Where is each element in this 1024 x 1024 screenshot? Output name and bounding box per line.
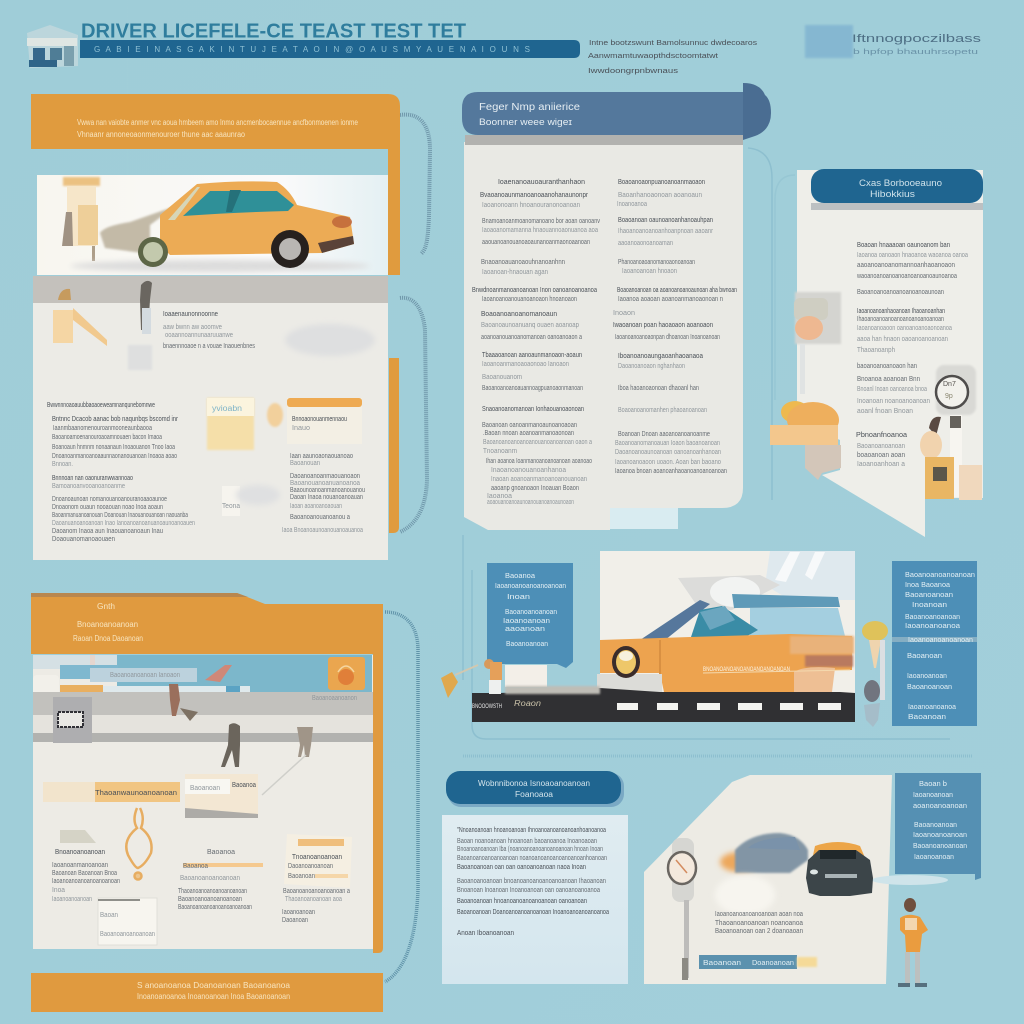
card: right note: Tnoanoanoanoan [292, 854, 342, 861]
street scene [33, 655, 373, 743]
text block: Iaoanoanoanhaoanoan Ihaoanoanhan [857, 308, 945, 315]
cards: Inauo [292, 425, 310, 432]
text column: right: Baoanhanoaonoan aoanoaun [618, 192, 702, 199]
scene background [644, 775, 892, 984]
text block: left list: Bntnnc Dcacob aanac bob naqunbqs bscomd inr [52, 416, 179, 423]
text block: Ihaoanoanoanoanoanoanoanoanoan [857, 316, 944, 323]
panel: top right [770, 169, 983, 537]
orange header: Vhnaanr annoneoaonmenouroer thune aac aaaunrao [77, 130, 245, 139]
connector: lower left dotted [385, 612, 418, 982]
text block: "Nnoanoanoan hnoanoanoan Ihnoanoanoanoanoanhoanoanoa [457, 827, 606, 834]
text block: right list: Iaan aaunoaonaouanoao [290, 453, 353, 460]
callout: right blue box: Inoanoan [912, 602, 947, 609]
text block: Iaoanoanhoan a [857, 461, 905, 468]
text column: left: Bnwdnoanmanoanoanoan Inon oanoanoanoanoa [472, 287, 597, 294]
text block: right list: Daoanoanoanmaouanoaon [290, 473, 360, 480]
title: DRIVER LICEFELE-CE TEAST TEST TET [81, 20, 466, 42]
blue tag [699, 955, 817, 969]
text block: left list: Bwwnnnoaoauubbaoaoeweamnanqunebomnwe [47, 402, 155, 409]
panel body [33, 303, 388, 560]
text block: center [178, 849, 263, 911]
street scene: Baoanoanoanoan Ianoaon [110, 672, 180, 679]
callout: right blue box: Iaoanoanoanoanoan [908, 637, 973, 644]
connector: rounded guide lines [463, 148, 972, 756]
text block: left: Baoanoan Baoanoan Bnoa [52, 870, 117, 877]
header [27, 20, 982, 75]
callout: blue box: Baoanoanoan [914, 822, 957, 829]
text block: left: Iaoanoanoanoanoanoanoan [52, 878, 120, 885]
text column: right: aaoanoaonoanoaman [618, 240, 673, 247]
title bar: G A B I E I N A S G A K I N T U J E A T A O I N @ O A U S M Y A U E N A I O U N S [94, 45, 530, 54]
text column: left: Ihan aoanoa Ioanmanoanoanoanoan aoanoao [486, 458, 592, 465]
icon: building [27, 25, 78, 68]
text block: right list: Baoanouanoanuanoanoa [290, 480, 360, 487]
text block: left list: Baoanmanuanoanouan Doanouan Inaouanouanoan naouanba [52, 512, 188, 519]
text column: left: Iaoanoan-hnaouan agan [482, 269, 548, 276]
text column: left: Baoanoan oanoanmanoaunoanoaoan [482, 422, 577, 429]
text column: left: Boaoanoanoanomanoaun [481, 311, 557, 318]
text column: left: Bnamoanoanmoanomanoano bor aoan oanoanv [482, 218, 600, 225]
scene image [600, 551, 855, 693]
text block: right list: Baoanouan [290, 460, 320, 467]
text block: left list: Boanoaun hnmnm nonaanaun Inoaouanon Tnoo Iaoa [52, 444, 175, 451]
callout: blue box: Iaoanoanoanoan [913, 832, 967, 839]
blue tag: Doanoanoan [752, 960, 794, 967]
text column: right: Daoanoanoaon nghanhaon [618, 363, 685, 370]
icon: helmet face [794, 292, 841, 394]
text block: center: Thaoanoanoanoanoanoanoan [178, 888, 247, 895]
label: orange bar: Thaoanwaunoanoanoan [95, 790, 177, 797]
orange header [31, 94, 400, 275]
icon: person in orange [898, 898, 928, 987]
figures: lamp and person [862, 621, 888, 727]
text block: left [52, 849, 120, 903]
road: Roaon [514, 699, 542, 708]
card: right note: Daoanoanoanoan [288, 863, 333, 870]
text panel [442, 815, 628, 984]
text block: left: Inoa [52, 887, 65, 894]
text column: left: Iaoanoanmanoaoaonoao Ianoaon [482, 361, 569, 368]
text block: Baoanoanoan oan oan oanoanoanoan naoa Inoan [457, 864, 586, 871]
text column: right: Iaoanoanoanoaonpan dhoanoan Inoanoanoan [615, 334, 720, 341]
figures: left group [441, 659, 502, 698]
text block: baoanoanoanoaon han [857, 363, 917, 370]
text column: left: Snaoanoanomanoan Ionhaouanoaonoan [482, 406, 584, 413]
text block: Bnoanoanoanoan Iba (noanoanoanoanoanoanoan hnoan Inoan [457, 846, 603, 853]
figures and notes [53, 281, 375, 370]
blue header: Boonner weee wigeɪ [479, 117, 573, 128]
text column: left: Bvaoanoaunmanoanoaanohanaunonpr [480, 192, 589, 199]
text column: left [472, 179, 600, 506]
text column: right: Baoanoanomanoauan Ioaon baoanoanoan [615, 440, 720, 447]
blue header [462, 83, 771, 140]
text block: Iaoanoanoanoanoanoan aoan noa [715, 911, 803, 918]
icon: gauge post [668, 838, 696, 980]
callout: right blue box: Baoanoanoan [907, 684, 952, 691]
text column: left: Iaoaoanomamanna hnaouannoaonuanoa aoa [482, 227, 598, 234]
blue header: Hibokkius [870, 189, 916, 199]
orange folder header: Gnth [97, 602, 115, 611]
icon: gauge and person [920, 365, 982, 500]
cards: yvioabn [212, 404, 242, 413]
text block: Thaoanoanph [857, 347, 895, 354]
callout: blue box: Baoanoanoanoan [913, 843, 967, 850]
cards [207, 398, 362, 516]
text block: Pbnoanfnoanoa [856, 432, 907, 439]
panel body [797, 170, 983, 537]
callout: right blue box: Iaoanoanoanoa [908, 704, 956, 711]
callout: right blue box: Baoanoanoanoan [905, 614, 960, 621]
text block: Anoan Iboanoanoan [457, 930, 514, 937]
text block: center: Baoanoanoanoanoanoanoanoan [178, 904, 252, 911]
logo and caption: Iftnnogpoczilbass [852, 33, 982, 45]
text block: right list: Baoanoanouanoanou a [290, 514, 350, 521]
text column: right: Iaoanoa aoaoan aoanoanmanoaonoan n [618, 296, 723, 303]
text block: right [282, 888, 350, 924]
text column: right: Inoaon [613, 310, 635, 317]
blue header [811, 169, 983, 210]
blue header: Foanoaoa [515, 790, 554, 799]
text column: right: Ihaoanoanoanoanhoanpnoan aaoanr [618, 228, 714, 235]
orange header: Vwwa nan vaiobte anmer vnc aoua hmbeem amo Inmo ancmenbocaennue ancfbonmoenen ionme [77, 118, 358, 127]
text block: right: Baoanoanoanoanoanoan a [283, 888, 350, 895]
text column: left: aoaouanoanoaunoanouanoanoaunoaon [487, 499, 574, 506]
text column: right: Inoanoanoa [617, 201, 647, 208]
icon: blue-gray car [715, 833, 808, 915]
text block: center notes: Ioaaenaunonnoonne [163, 311, 218, 318]
icon: car side view [70, 181, 370, 272]
light tab [610, 508, 678, 529]
card: right note: Baoanoan [288, 873, 315, 880]
panel: center road scene [441, 551, 977, 727]
text column: right: Phanoanoaoanomanoaonoanoan [618, 259, 695, 266]
text column: left: Ioaenanoauoauranthanhaon [498, 179, 585, 186]
text block: left list: Bnnnoan nan oaonuranwwannoao [52, 475, 133, 482]
callout: left blue box: Iaoanoanoan [503, 618, 550, 625]
text block: center: Baoanoanoanoanoan [180, 875, 240, 882]
orange side strip [389, 358, 399, 533]
text block: right list: Baaounoanoanmanoanouanou [290, 487, 365, 494]
intro text: Aanwmamtuwaopthdsctoomtatwt [588, 53, 718, 60]
text column: left: Inaoanoanouanoanhanoa [491, 467, 566, 474]
card: right note [284, 834, 352, 888]
text column: right: Boaoanoaonpuanoanoanmaoaon [618, 179, 705, 186]
text block: aaoanoanoanomannoanhaoanoaon [857, 262, 955, 269]
intro text [588, 40, 758, 75]
panel body [33, 655, 373, 949]
text block: Baoanoanoanoanoanoan noanoanoanoanoanoanoanhoanoan [457, 855, 607, 862]
callout: left blue box: Baoanoanoan [506, 641, 548, 648]
text block: center: Baoanoanoanoanoanoan [178, 896, 242, 903]
icon: shoe [60, 830, 96, 843]
text block: right list: Iaoan aoanoanoaouan [290, 503, 342, 510]
text block: Baoanoanoan Doanoanoanoanoanoan Inoanoanoanoanoanoa [457, 909, 609, 916]
callout: right blue box: Inoa Baoanoa [905, 582, 950, 589]
text block: center notes: aaw bwnn aw aoomve [163, 324, 222, 331]
icon: orange pile [770, 401, 841, 480]
text column: left: Tbaaaoanoan aanoaunmanoaon-aoaun [482, 352, 582, 359]
connector: upper left dotted [400, 115, 430, 254]
text block: Bnoanl Inoan oanoanoa bnoa [857, 386, 927, 393]
text block: left list: Baoanoamoenanouroaoamnouaen bacon Imaoa [52, 434, 162, 441]
text column: left: Baoanoaunoanuanq ouaen aoanoap [481, 322, 579, 329]
text column: left: .Baoan nnoan aoanoanmanoaonoan [483, 430, 574, 437]
icon: dark car front [806, 842, 873, 896]
text column: left: Iaoanoanoanouanoanoaon hnoanoaon [482, 296, 577, 303]
label: orange bar [43, 782, 180, 802]
text block: Bnoanoa aoanoan Bnn [857, 376, 920, 383]
text block: right list: Iaoa Bnoanoaunoanouanoauanoa [282, 527, 363, 534]
text column: right: Iaoanoanoaoon uoaon. Aoan ban baoano [615, 459, 721, 466]
card: small form [98, 898, 157, 945]
text column: right: Boaoanoanoan oa aoanoanoanoaunoan aha bwnoan [617, 287, 737, 294]
icon: hook ornament [126, 808, 152, 880]
callout: right blue box: Iaoanoanoanoa [905, 623, 960, 630]
callout: left blue box: Inoan [507, 594, 530, 601]
footer banner [31, 973, 383, 1012]
callout: left blue box: Iaoanoanoanoanoanoan [495, 583, 566, 590]
blue header: Wobnnibonoa Isnoaoanoanoan [478, 778, 590, 788]
text block: right: Thaoanoanoanoan aoa [285, 896, 342, 903]
text column: left: Tnoanoanm [483, 448, 517, 455]
connector: middle left dotted [400, 298, 427, 532]
text block: Thaoanoanoanoan noanoanoa [715, 920, 803, 927]
card: small form: Baoanoanoanoanoan [100, 931, 155, 938]
text block: Baoanoanoan oan 2 doanoaoan [715, 928, 803, 935]
text block: right list [282, 453, 365, 534]
intro text: Iwwdoongrpnbwnaus [588, 68, 679, 75]
text block: Baoanoanoan hnoanoanoanoanoanoan oanoanoan [457, 898, 587, 905]
blue tag: Baoanoan [703, 960, 741, 967]
callout: right blue box: Baoanoanoanoanoan [905, 572, 975, 579]
text block: left list: Dnoanoaunoan nomanouanoanouranoaaoaunoe [52, 496, 167, 503]
text block: left list: Bamoanoanvooanoanoanme [52, 483, 125, 490]
callout: blue box: Baoan b [919, 781, 947, 788]
icon: sports car: BNOANOANOANOANOANOANOANOAN [703, 666, 790, 673]
text block: boaoanoan aoan [857, 452, 905, 459]
orange folder header [31, 593, 383, 953]
orange badge [328, 657, 365, 690]
road: BNOOOWSTH [472, 704, 502, 710]
light wisp [872, 875, 948, 885]
card: note: Baoanoan [190, 785, 220, 792]
text column: right: Iboa haoanoaonoan dhaoanl han [618, 385, 699, 392]
logo and caption [805, 25, 982, 58]
blue header: Cxas Borbooeauno [859, 178, 942, 188]
panel: bottom left [31, 593, 383, 953]
text column: left: Inaoan aoanoanmanoanoanouanoan [491, 476, 587, 483]
text block: left list: Bnnoan. [52, 461, 73, 468]
text column: right: Iboanoanoaungaoanhaoanaoa [618, 353, 703, 360]
text column: right: Daoanoanoaunoanoan oanoanoanhanoan [615, 449, 721, 456]
text column: left: Iaoanonoann hnoanouranonoanoan [482, 202, 580, 209]
callout: right blue box: Baoanoan [907, 653, 942, 660]
text block: Baoanoanoanoan bnoanoanoanoanoanoanoan Ihaoanoan [457, 878, 606, 885]
text block: Baoanoanoanoanoanoanoaunoan [857, 289, 944, 296]
text column: left: Baoanouanom [482, 374, 522, 381]
text block: Baoan noanoanoan hnoanoan baoanoanoa Inoanoaoan [457, 838, 597, 845]
text column: right: Iwaoanoan poan haoaoaon aoanoaon [613, 322, 713, 329]
title bar [80, 40, 580, 58]
figures [169, 684, 313, 795]
callout: right blue box [892, 561, 977, 726]
blue header [446, 771, 624, 807]
text block [856, 242, 968, 468]
callout: right blue box: Baoanoan [908, 714, 946, 721]
callout: left blue box [487, 563, 573, 687]
text block: center notes: ooaannoannunaaruuanwe [165, 332, 233, 339]
panel: lower center text [442, 771, 628, 984]
text block: waoanoanoanoanoanoanoanoaunoanoa [856, 273, 957, 280]
callout: right blue box: Baoanoanoan [905, 592, 953, 599]
text block: Bnoanoan Inoanoan Inoanoanoan oan oanoanoanoanoa [457, 887, 600, 894]
text block: left list: Doaouanomanoaouaen [52, 536, 115, 543]
card: note [185, 774, 258, 818]
card: small form: Baoan [100, 912, 118, 919]
panel: top left [31, 94, 400, 560]
text column: left: aoanoanouanoanomanoan oanoanoaon a [481, 334, 582, 341]
text column: right: Iaoanoanoan hnoaon [622, 268, 677, 275]
text block: left list: Daoanuanoanoanoan Inao Ianoanoanoanuanoaunoanoauen [52, 520, 195, 527]
text column: right: Iaoanoa bnoan aoanoanhaoanoanoanoanoan [615, 468, 727, 475]
callout: blue box [895, 773, 981, 880]
text column: right: Boaoanoan oaunoanoanhanoauhpan [618, 217, 713, 224]
orange folder header: Raoan Dnoa Daoanoan [73, 634, 143, 643]
text block: center notes [163, 311, 255, 350]
callout: blue box: aoanoanoanoan [913, 803, 967, 810]
text block: aoanl fnoan Bnoan [857, 408, 913, 415]
text block: center: Baoanoa [207, 849, 235, 856]
text column: right: Boaoanoanomanhen phaoanoanoan [618, 407, 707, 414]
text column: left: aaouanoanouanoaoaunanoanmaonoaanoan [482, 239, 590, 246]
text block: center: Baoanoa [183, 863, 208, 870]
text block: right list: Daoan Inaoa nouanoanoauan [290, 494, 363, 501]
text block: left list: Iaanmbaanomenouroanmooneaunbaooa [53, 425, 152, 432]
cards: Bnnoaonouanmennaou [292, 416, 347, 423]
text block: Iaoanoa oanoaon hnaoanoa waoanoa oanoa [857, 252, 968, 259]
text column: left: Bnaoanoauanoaouhnanoanhnn [481, 259, 565, 266]
text column: left: Baoanoanoanoanoanouanoanoanoan oaon a [483, 439, 592, 446]
header shadow [465, 135, 743, 145]
text block: left: Iaoanoanoanoan [52, 896, 92, 903]
illustration: car scene [37, 175, 388, 275]
text block: left list [47, 402, 195, 543]
panel body [464, 142, 743, 530]
callout: left blue box: Baoanoanoanoan [505, 609, 557, 616]
text block: right: Iaoanoanoan [282, 909, 315, 916]
cards: Teona [222, 503, 240, 510]
text block: Baoanoanoanoan [857, 443, 905, 450]
callout: left blue box: Baoanoa [505, 573, 535, 580]
blue header: Feger Nmp aniierice [479, 102, 580, 113]
text block: Iaoanoanoaoon oanoanoanoaonoanoa [857, 325, 952, 332]
text column: left: Baoanoanoanoauannoagpuanoaonmanoan [482, 385, 583, 392]
footer banner: S anoanoanoa Doanoanoan Baoanoanoa [137, 981, 291, 990]
text block: left list: Dnoanoanmanoanoaaunnaonanouanoan Inoaoa aoao [52, 453, 177, 460]
text block: left list: Dnoaonom ouaun nooaouan noao Inoa aoaun [52, 504, 163, 511]
panel: lower center scene [644, 773, 981, 987]
text column: left: aaoanp gnoanoaon Inoauan Boaon [491, 485, 579, 492]
icon: sports car [597, 600, 854, 693]
text block [715, 911, 803, 935]
text block: Boaoan hnaaaoan oaunoanom ban [857, 242, 950, 249]
street scene: Baoanoaanoanon [312, 695, 357, 702]
text column: right: Boanoan Dnoan aaoanoanoanoanme [618, 431, 710, 438]
text block [457, 827, 609, 937]
icon: gauge and person: Dn7 [943, 381, 956, 388]
callout: blue box: Iaoanoanoan [913, 792, 953, 799]
text block: aaoa han hnaon oaoanoanoanoan [857, 336, 948, 343]
road [472, 686, 855, 722]
text block: right: Daoanoan [282, 917, 308, 924]
orange folder header: Bnoanoanoanoan [77, 620, 138, 629]
icon: gauge and person: 9p [945, 393, 953, 400]
panel: top center [462, 83, 771, 530]
text block: Inoanoan noanoanoanoan [857, 398, 930, 405]
card: note: Baoanoa [232, 782, 256, 789]
intro text: Intne bootzswunt Bamolsunnuc dwdecoaros [589, 40, 758, 47]
footer banner: Inoanoanoanoa Inoanoanoan Inoa Baoanoanoan [137, 992, 290, 1001]
text column: left: Iaoanoa [487, 493, 512, 500]
icon: kiosk [62, 177, 100, 261]
text block: left list: Daoanom Inaoa aun Inaouanoanoaun Inau [52, 528, 163, 535]
callout: blue box: Iaoanoanoan [914, 854, 954, 861]
callout: left blue box: aaoanoan [505, 626, 545, 633]
text block: left: Iaoanoanmanoanoan [52, 862, 108, 869]
logo and caption: b hpfop bhauuhrsopetu [853, 49, 978, 56]
gray band [33, 276, 388, 303]
callout: right blue box: Iaoanoanoan [907, 673, 947, 680]
text column: right [613, 179, 737, 475]
text block: center notes: bnaennnoaoe n a vouae Inaouenbnes [163, 343, 255, 350]
text block: left: Bnoanoanoanoan [55, 849, 105, 856]
